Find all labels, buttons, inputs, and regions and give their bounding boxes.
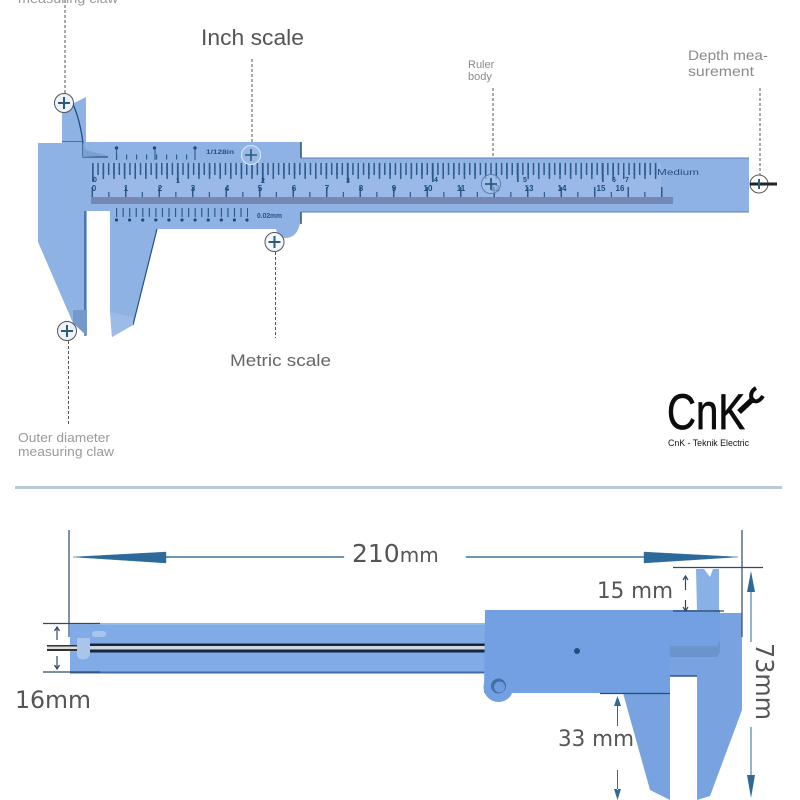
moving jaw bbox=[623, 693, 670, 800]
jaw gap edge bbox=[670, 675, 697, 677]
leader lines bbox=[65, 0, 760, 426]
label: depth measurement: Depth mea- bbox=[688, 47, 768, 63]
beam lower shade bbox=[70, 672, 486, 674]
metric scale numerals: 0 bbox=[92, 184, 97, 193]
metric scale numerals: 16 bbox=[616, 184, 625, 193]
metric scale numerals: 2 bbox=[158, 184, 163, 193]
metric scale numerals: 8 bbox=[359, 184, 364, 193]
metric scale numerals: 9 bbox=[392, 184, 397, 193]
metric scale numerals: 13 bbox=[525, 184, 534, 193]
depth rod tip highlight bbox=[47, 646, 77, 649]
main metric ticks bbox=[92, 192, 674, 194]
value: 210mm bbox=[352, 539, 439, 568]
extension lines bbox=[673, 568, 763, 611]
lobe hole bbox=[491, 678, 506, 694]
caliper body bbox=[47, 569, 742, 800]
inch scale numerals: 2 bbox=[261, 178, 265, 185]
metric scale numerals bbox=[92, 184, 625, 193]
logo tagline: CnK - Teknik Electric bbox=[668, 438, 749, 449]
dimension: 210mm bbox=[69, 530, 742, 637]
lobe bbox=[484, 672, 514, 702]
depth rod highlight bbox=[88, 646, 486, 650]
gap between jaws bbox=[87, 211, 110, 340]
label: outer diameter measuring claw: measuring claw bbox=[18, 445, 115, 459]
jaw shadows bbox=[73, 104, 108, 157]
arrows bbox=[54, 627, 60, 669]
inch scale numerals: 6 bbox=[612, 177, 616, 184]
right extension line bbox=[741, 530, 743, 637]
metric scale numerals: 4 bbox=[225, 184, 230, 193]
icon: plus marker depth rod bbox=[750, 175, 777, 193]
extension lines bbox=[43, 624, 100, 672]
icon: wrench bbox=[739, 388, 763, 412]
down arrow bbox=[614, 770, 621, 800]
depth rod slot bbox=[88, 644, 486, 652]
dimension: 33mm bbox=[558, 694, 670, 800]
label: metric scale: Metric scale bbox=[230, 351, 331, 370]
icon: plus marker ruler body bbox=[482, 174, 500, 194]
inch scale numerals: 1 bbox=[176, 178, 180, 185]
left arrow bbox=[73, 552, 344, 563]
label: ruler body: body bbox=[468, 71, 492, 83]
inch scale numerals: 5 bbox=[523, 177, 527, 184]
rod clip bbox=[77, 638, 90, 660]
fixed jaw and main beam bbox=[38, 143, 749, 336]
down arrow bbox=[747, 727, 755, 798]
metric scale numerals: 12 bbox=[491, 184, 500, 193]
inch scale numerals: 0 bbox=[93, 177, 97, 184]
divider bbox=[15, 486, 782, 489]
lower vernier dots bbox=[115, 218, 249, 222]
up arrow bbox=[747, 571, 755, 642]
small arrows bbox=[683, 576, 688, 611]
metric scale numerals: 3 bbox=[191, 184, 196, 193]
upper claw bbox=[62, 97, 86, 143]
lobe hole inner bbox=[494, 682, 505, 692]
dimension: 15mm bbox=[597, 568, 763, 611]
depth rod tip bbox=[47, 645, 77, 651]
logo wordmark: CnK bbox=[667, 384, 745, 440]
dimension: 16mm bbox=[15, 624, 100, 714]
value: 33 mm bbox=[558, 727, 634, 752]
inch scale numerals bbox=[93, 177, 629, 185]
label: ruler body: Ruler bbox=[468, 59, 495, 71]
beam upper band bbox=[70, 623, 486, 625]
beam bbox=[70, 623, 486, 673]
left extension line bbox=[68, 530, 70, 637]
metric scale numerals: 1 bbox=[124, 184, 129, 193]
slider hole bbox=[574, 648, 580, 654]
inch scale numerals: 3 bbox=[346, 178, 350, 185]
panel: labelled top caliper bbox=[18, 0, 777, 459]
upper vernier scale bbox=[116, 150, 196, 160]
metric scale numerals: 14 bbox=[558, 184, 567, 193]
inch scale numerals: 4 bbox=[434, 177, 438, 184]
icon: plus marker upper claw bbox=[54, 94, 74, 112]
panel: dimensioned bottom caliper bbox=[15, 530, 779, 800]
upper vernier caption: 1/128in bbox=[206, 149, 234, 156]
beam caption: Medium bbox=[657, 167, 699, 177]
fixed jaw bbox=[670, 613, 742, 800]
top extension line bbox=[600, 692, 670, 694]
icon: plus marker outer claw bbox=[58, 322, 76, 340]
slider bbox=[484, 610, 720, 693]
metric scale numerals: 5 bbox=[258, 184, 263, 193]
icon: plus marker metric scale bbox=[265, 232, 284, 252]
upper claw bbox=[696, 569, 719, 612]
step shadow bbox=[670, 640, 720, 657]
inner scale strip bbox=[91, 163, 661, 197]
dimension: 73mm bbox=[747, 571, 779, 798]
metric scale numerals: 11 bbox=[457, 184, 466, 193]
inch scale numerals: 7 bbox=[625, 177, 629, 184]
metric scale numerals: 6 bbox=[292, 184, 297, 193]
icon: plus marker inch scale bbox=[242, 146, 260, 164]
value: 15 mm bbox=[597, 579, 673, 604]
value: 73mm bbox=[750, 643, 779, 720]
slider bbox=[82, 142, 301, 337]
metric scale numerals: 7 bbox=[325, 184, 330, 193]
main inch ticks bbox=[92, 169, 657, 172]
lower vernier scale bbox=[116, 208, 248, 217]
caliper body bbox=[38, 97, 749, 340]
value: 16mm bbox=[15, 686, 91, 714]
metric scale numerals: 15 bbox=[597, 184, 606, 193]
label: depth measurement: surement bbox=[688, 63, 754, 79]
depth slot bbox=[91, 197, 673, 204]
label: outer diameter measuring claw: Outer diameter bbox=[18, 431, 110, 445]
upper vernier dots bbox=[115, 146, 197, 150]
right arrow bbox=[466, 552, 738, 563]
lower vernier caption: 0.02mm bbox=[257, 213, 282, 220]
beam slot notch bbox=[92, 631, 106, 637]
heading: inch scale: Inch scale bbox=[201, 25, 304, 50]
metric scale numerals: 10 bbox=[424, 184, 433, 193]
up arrow bbox=[614, 696, 621, 726]
logo: CnK bbox=[667, 384, 763, 449]
